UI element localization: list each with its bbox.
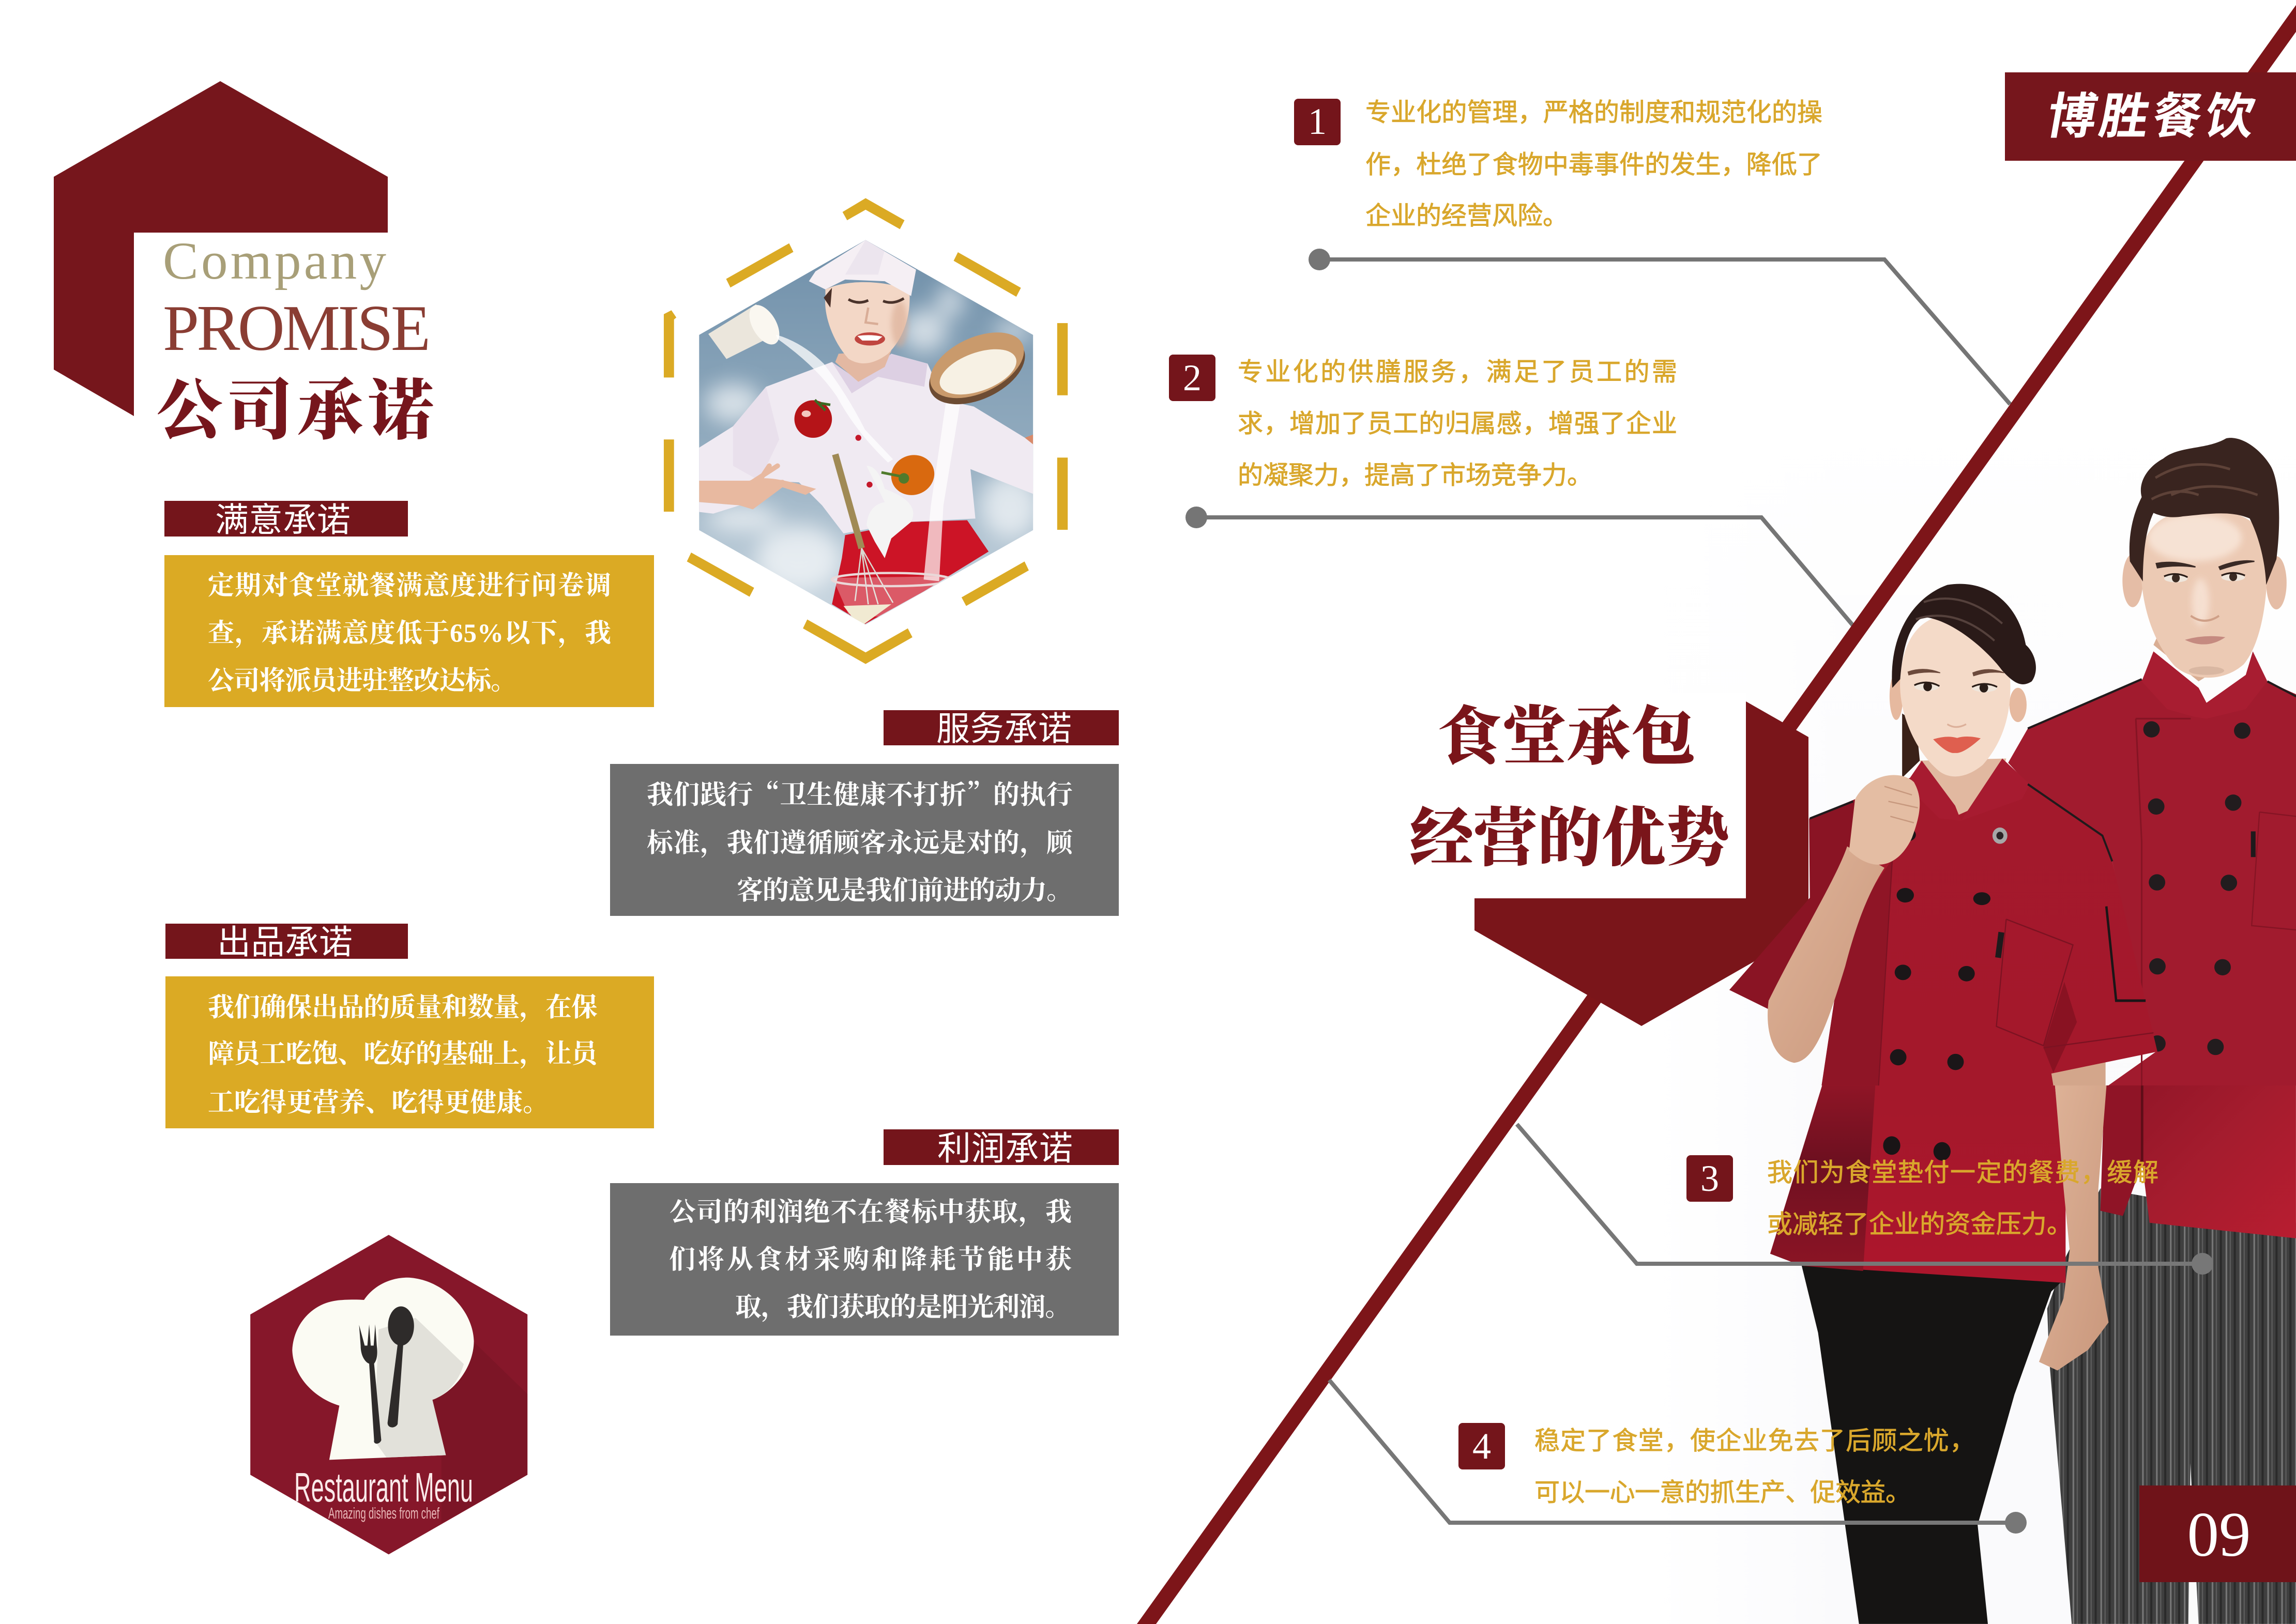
label bar [884, 1129, 1119, 1165]
icon: restaurant menu hexagon logo [250, 1235, 527, 1554]
brand name: 博胜餐饮 [2043, 89, 2259, 144]
heading: company promise [157, 232, 434, 448]
badge 4 [1458, 1423, 1505, 1469]
advantage 1 text [1365, 99, 1822, 230]
connector 4 [1329, 1380, 2027, 1534]
photo: man in chef uniform [2008, 438, 2296, 1624]
advantage 2 text: 专业化的供膳服务，满足了员工的需 [1238, 358, 1677, 386]
central hexagon banner [1474, 701, 1808, 1026]
heading line: PROMISE: PROMISE [163, 293, 431, 364]
gold text box [164, 555, 654, 707]
heading line: 公司承诺: 公司承诺 [157, 374, 434, 448]
advantage 3 text [1767, 1159, 2158, 1238]
label bar [884, 710, 1119, 745]
man lower body [2047, 1085, 2296, 1624]
brand tab background [2005, 72, 2296, 161]
advantage 4 [1458, 1423, 1975, 1507]
title line two: 经营的优势 [1409, 803, 1730, 874]
icon: gold dashed hexagon frame [664, 198, 1068, 664]
label text: 服务承诺 [936, 710, 1072, 747]
brand tab: 博胜餐饮 [2005, 72, 2296, 161]
woman lower body [1770, 1085, 2108, 1624]
advantage 2 text: 求，增加了员工的归属感，增强了企业 [1238, 410, 1677, 438]
advantage 2 [1169, 355, 1677, 489]
photo: woman in chef uniform [1729, 584, 2157, 1624]
label bar [165, 924, 408, 959]
body text [208, 993, 601, 1117]
label text: 出品承诺 [217, 923, 353, 961]
body text: 查，承诺满意度低于65%以下，我 [208, 618, 611, 648]
body text: 定期对食堂就餐满意度进行问卷调 [208, 571, 611, 601]
label bar [164, 501, 408, 537]
badge number 4: 4 [1472, 1426, 1491, 1467]
page number box [2139, 1485, 2296, 1582]
label text: 利润承诺 [937, 1129, 1073, 1167]
body text: 我们践行“卫生健康不打折”的执行 [647, 773, 1073, 811]
man upper body [2008, 438, 2296, 1085]
body text: 标准，我们遵循顾客永远是对的，顾 [647, 829, 1074, 858]
page number text: 09 [2187, 1499, 2251, 1570]
white notch of central hexagon [1396, 693, 1746, 898]
body text: 客的意见是我们前进的动力。 [737, 876, 1073, 906]
logo tagline: Amazing dishes from chef [328, 1504, 439, 1522]
diagonal band [1137, 0, 2296, 1624]
top left hexagon emblem [54, 81, 388, 416]
page number [2139, 1485, 2296, 1582]
advantage 4 text: 稳定了食堂，使企业免去了后顾之忧， [1534, 1427, 1975, 1455]
body text: 取，我们获取的是阳光利润。 [735, 1293, 1071, 1322]
badge 3 [1686, 1155, 1733, 1202]
badge number 1: 1 [1308, 101, 1327, 142]
woman upper body [1729, 584, 2157, 1085]
advantage 2 text [1238, 358, 1677, 489]
gold text box [165, 976, 654, 1128]
badge number 3: 3 [1700, 1158, 1719, 1199]
panel: 服务承诺 [610, 710, 1119, 916]
body text: 障员工吃饱、吃好的基础上，让员 [208, 1039, 601, 1069]
advantage 1 text: 作，杜绝了食物中毒事件的发生，降低了 [1365, 151, 1822, 179]
panel: 利润承诺 [610, 1129, 1119, 1336]
logo title: Restaurant Menu [294, 1464, 473, 1510]
advantage 2 text: 的凝聚力，提高了市场竞争力。 [1238, 462, 1592, 489]
body text: 们将从食材采购和降耗节能中获 [669, 1245, 1072, 1275]
grey text box [610, 764, 1119, 916]
heading line: Company: Company [163, 232, 387, 290]
body text: 公司的利润绝不在餐标中获取，我 [670, 1198, 1072, 1227]
advantage 4 text: 可以一心一意的抓生产、促效益。 [1534, 1479, 1911, 1507]
advantage 1 [1294, 99, 1822, 230]
body text [208, 571, 611, 696]
body text: 工吃得更营养、吃得更健康。 [208, 1088, 549, 1117]
badge 1 [1294, 99, 1341, 145]
connector 2 [1185, 507, 1853, 625]
badge number 2: 2 [1183, 357, 1202, 399]
advantage 3 [1686, 1155, 2158, 1238]
connector 3 [1517, 1124, 2213, 1275]
advantage 4 text [1534, 1427, 1975, 1507]
photo: chef tossing ingredients [693, 235, 1040, 631]
advantage 1 text: 专业化的管理，严格的制度和规范化的操 [1365, 99, 1822, 127]
label text: 满意承诺 [215, 501, 351, 539]
body text [647, 773, 1074, 906]
body text: 公司将派员进驻整改达标。 [208, 666, 517, 696]
body text: 我们确保出品的质量和数量，在保 [208, 993, 598, 1022]
grey text box [610, 1183, 1119, 1336]
badge 2 [1169, 355, 1215, 401]
advantage 1 text: 企业的经营风险。 [1365, 202, 1568, 230]
title: 食堂承包经营的优势 [1409, 702, 1730, 874]
body text [669, 1198, 1072, 1322]
panel: 满意承诺 [164, 501, 654, 707]
title line one: 食堂承包 [1438, 702, 1695, 773]
photo backdrop tint [1654, 413, 2296, 1624]
panel: 出品承诺 [165, 923, 654, 1128]
hexagon logo art [250, 1235, 527, 1554]
advantage 3 text: 或减轻了企业的资金压力。 [1767, 1211, 2072, 1238]
advantage 3 text: 我们为食堂垫付一定的餐费，缓解 [1767, 1159, 2158, 1187]
connector 1 [1309, 249, 2010, 404]
